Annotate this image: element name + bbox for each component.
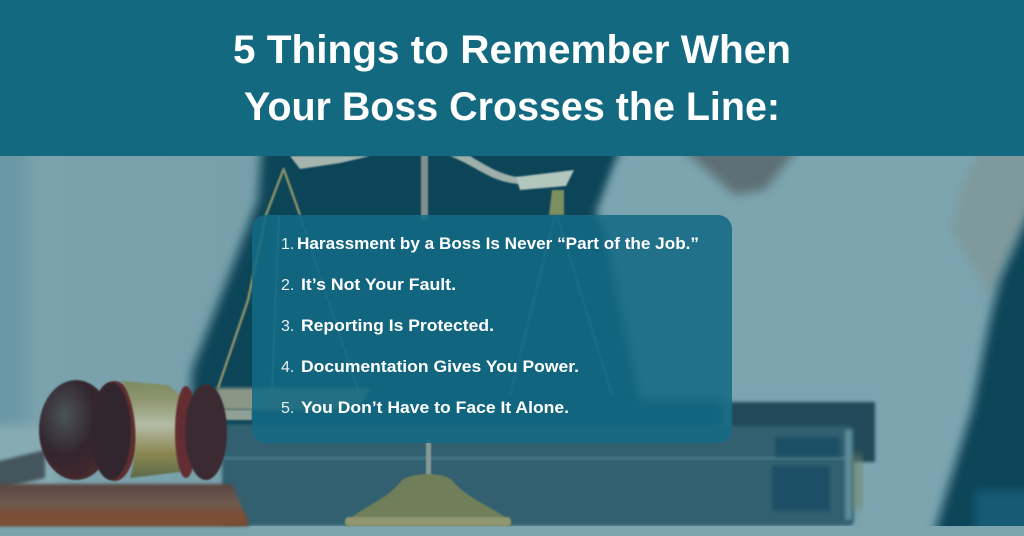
list item 2: 2. xyxy=(281,277,294,294)
scale chains xyxy=(218,168,284,388)
list item 3: 3. xyxy=(281,318,294,335)
list item 1: 1. xyxy=(281,236,294,253)
background photo: courtroom scene with teal tint xyxy=(0,130,1024,536)
list item 5: You Don’t Have to Face It Alone. xyxy=(301,398,569,417)
list item 4: 4. xyxy=(281,359,294,376)
list item 5: 5. xyxy=(281,400,294,417)
table surface xyxy=(0,526,1024,536)
scale base xyxy=(345,474,512,526)
left scale pan xyxy=(215,388,370,410)
list item 4: Documentation Gives You Power. xyxy=(301,357,579,376)
panel: numbered list xyxy=(252,215,732,443)
list item 1: Harassment by a Boss Is Never “Part of the Job.” xyxy=(297,234,699,253)
stack of books and binders xyxy=(222,402,875,526)
tan arm at right xyxy=(952,140,1024,295)
white shirt, blurred xyxy=(596,140,1000,536)
white book at left xyxy=(0,425,60,500)
title xyxy=(233,28,791,129)
neck shadow at top of shirt xyxy=(672,140,805,195)
title: Your Boss Crosses the Line: xyxy=(244,85,780,129)
scales of justice xyxy=(215,150,612,526)
title: 5 Things to Remember When xyxy=(233,28,791,72)
person in dark clothing, blurred xyxy=(190,140,725,430)
header banner xyxy=(0,0,1024,156)
gavel xyxy=(0,380,250,526)
list item 2: It’s Not Your Fault. xyxy=(301,275,456,294)
dark sleeve at right xyxy=(932,190,1024,536)
list item 3: Reporting Is Protected. xyxy=(301,316,494,335)
